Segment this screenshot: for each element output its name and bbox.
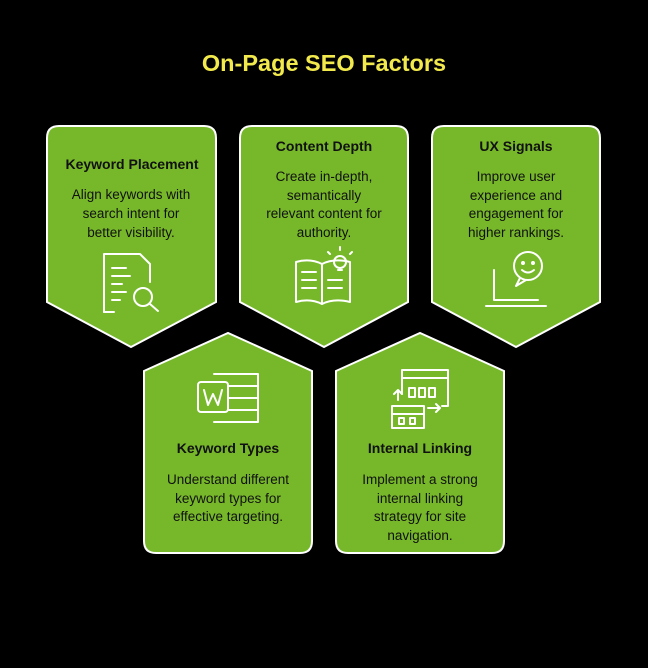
- panel: internal linking: [336, 333, 504, 553]
- panel: keyword types: [144, 333, 312, 553]
- panel: keyword types: Keyword Types: [177, 440, 279, 456]
- icon: linked pages: [392, 370, 448, 428]
- panel: ux signals: Improve user: [477, 169, 556, 184]
- panel: keyword placement: better visibility.: [87, 225, 175, 240]
- icon: book with bulb: [296, 247, 352, 304]
- icon: word document: [198, 374, 258, 422]
- panel: ux signals: higher rankings.: [468, 225, 564, 240]
- panel: keyword types: effective targeting.: [173, 509, 283, 524]
- panel: keyword types: keyword types for: [175, 491, 281, 506]
- icon: laptop with smiley: [486, 252, 546, 306]
- panel: internal linking: internal linking: [377, 491, 463, 506]
- panel: keyword placement: search intent for: [83, 206, 180, 221]
- panel: content depth: Content Depth: [276, 138, 372, 154]
- panel: content depth: [240, 126, 408, 347]
- panel: ux signals: engagement for: [469, 206, 564, 221]
- panel: internal linking: Implement a strong: [362, 472, 478, 487]
- panel: ux signals: UX Signals: [479, 138, 553, 154]
- panel: content depth: Create in-depth,: [276, 169, 372, 184]
- title: On-Page SEO Factors: [202, 50, 446, 76]
- panel: ux signals: experience and: [470, 188, 562, 203]
- panel: keyword placement: Keyword Placement: [65, 156, 199, 172]
- panel: content depth: authority.: [297, 225, 351, 240]
- panel: content depth: semantically: [287, 188, 361, 203]
- panel: internal linking: strategy for site: [374, 509, 466, 524]
- icon: document search: [104, 254, 158, 312]
- panel: keyword types: Understand different: [167, 472, 289, 487]
- panel: internal linking: navigation.: [387, 528, 453, 543]
- panel: keyword placement: Align keywords with: [72, 187, 190, 202]
- panel: content depth: relevant content for: [266, 206, 382, 221]
- panel: ux signals: [432, 126, 600, 347]
- panel: internal linking: Internal Linking: [368, 440, 472, 456]
- panel: keyword placement: [47, 126, 216, 347]
